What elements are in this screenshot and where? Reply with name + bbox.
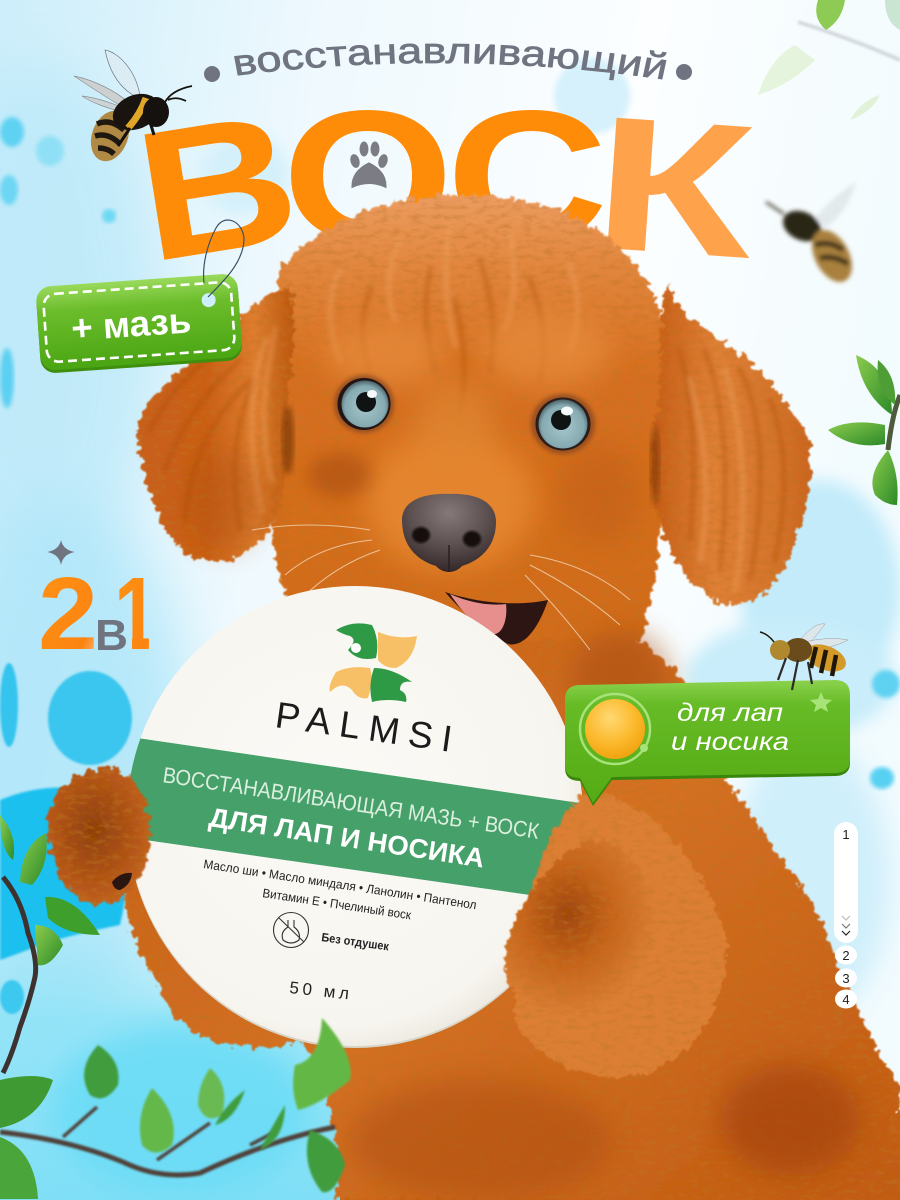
leaves: bottom left branches — [0, 815, 351, 1199]
icon: paw print — [349, 142, 389, 186]
bubble: для лап и носика — [565, 680, 850, 806]
jar no-fragrance label: Без отдушек — [321, 930, 391, 954]
title: ВОСК: О — [282, 72, 454, 280]
dog — [125, 195, 900, 1200]
dog right eye — [531, 394, 595, 454]
badge: 2 в 1: 1 — [114, 556, 158, 671]
title: ВОСК — [124, 71, 762, 301]
badge: 2 в 1: 2 — [38, 556, 98, 671]
jar green band — [130, 738, 579, 895]
jar logo — [330, 623, 417, 702]
slide navigation: 4 — [842, 992, 850, 1007]
jar lid — [110, 586, 600, 1048]
dog left ear — [137, 285, 294, 562]
bee: top left — [74, 50, 192, 167]
tag: + мазь — [35, 273, 243, 374]
dog fur clumps — [150, 225, 784, 590]
slide navigation: 1 — [842, 827, 850, 842]
leaves: top right branch — [758, 0, 900, 120]
dog whiskers — [252, 525, 630, 650]
slide navigation — [834, 822, 858, 1008]
jar brand: PALMSI — [273, 694, 464, 761]
jar volume: 50 мл — [289, 978, 353, 1004]
title: ВОСК: С — [446, 71, 608, 280]
dog left paw — [48, 768, 150, 905]
icon: ointment circle — [580, 694, 650, 764]
title: ВОСК: В — [124, 73, 311, 301]
subtitle: восстанавливающий — [204, 44, 692, 82]
dog right forearm and paw — [504, 790, 727, 1077]
jar band text: ДЛЯ ЛАП И НОСИКА — [207, 802, 486, 874]
tag: + мазь: + мазь — [70, 299, 192, 349]
badge: 2 в 1: В — [95, 611, 128, 660]
jar ingredients: Масло ши • Масло миндаля • Ланолин • Пантенол — [203, 857, 478, 912]
icon: no fragrance — [274, 912, 308, 948]
dog right ear — [652, 283, 811, 605]
slide navigation: 3 — [842, 971, 850, 986]
dog mouth and tongue — [445, 592, 548, 644]
slide navigation: 2 — [842, 948, 850, 963]
tag string — [204, 220, 244, 297]
jar ingredients: Витамин Е • Пчелиный воск — [262, 886, 412, 922]
jar band text: ВОССТАНАВЛИВАЮЩАЯ МАЗЬ + ВОСК — [161, 762, 541, 844]
subtitle: восстанавливающий: восстанавливающий — [234, 44, 667, 80]
bee: on bubble — [760, 624, 850, 690]
leaves: right side — [828, 355, 900, 505]
bee: blurred right — [766, 182, 860, 289]
bubble text: для лап — [677, 699, 783, 727]
bubble text — [671, 699, 789, 756]
dog shading — [185, 312, 860, 1200]
title: ВОСК: К — [587, 76, 762, 299]
badge: 2 в 1 — [42, 540, 149, 650]
dog head — [266, 195, 669, 640]
dog left eye — [334, 375, 394, 433]
icon: star — [810, 692, 832, 712]
dog nose — [402, 494, 496, 572]
bubble text: и носика — [671, 728, 789, 756]
dog body — [125, 600, 900, 1200]
